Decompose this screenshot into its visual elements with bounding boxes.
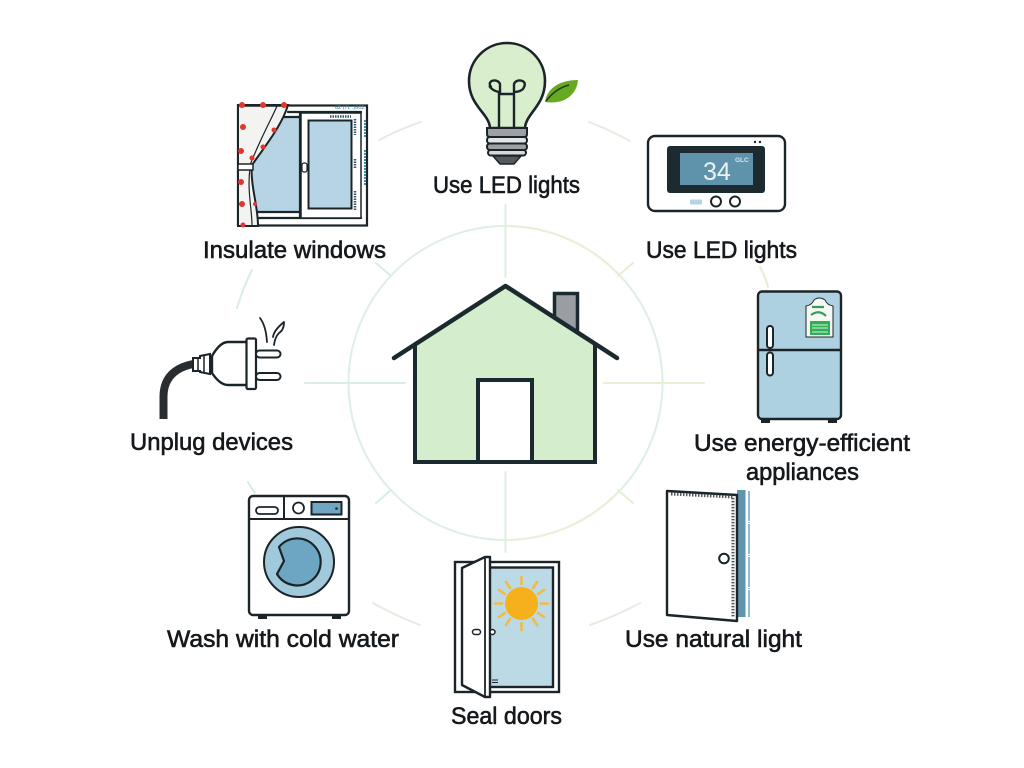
label: Insulate windows	[203, 237, 386, 264]
item: washer	[167, 496, 399, 653]
icon: thermostat: 34	[703, 158, 731, 186]
label: Seal doors	[451, 703, 562, 730]
icon: window with curtain: 62 (7L .)602	[335, 105, 364, 111]
icon: door with seal	[667, 490, 749, 621]
hub ring and spokes	[237, 122, 768, 625]
icon: refrigerator	[758, 292, 841, 423]
curtain red dots	[238, 102, 287, 228]
icon: thermostat	[648, 136, 785, 211]
label: Use LED lights	[433, 172, 580, 199]
item: unplug	[130, 318, 293, 456]
icon: window with curtain	[238, 102, 367, 228]
icon: light bulb	[469, 43, 578, 164]
label: Use energy-efficient	[694, 430, 910, 457]
energy label	[806, 298, 833, 337]
label: Unplug devices	[130, 429, 293, 456]
icon: door with sunlight	[455, 557, 559, 697]
icon: washing machine	[249, 496, 349, 619]
window dimension marks	[330, 116, 365, 211]
item: thermostat	[646, 136, 797, 264]
item: open door with sun	[451, 557, 562, 730]
sun	[505, 587, 538, 620]
item: LED bulb, top	[433, 43, 580, 199]
house body	[415, 285, 595, 462]
label: Use LED lights	[646, 237, 797, 264]
item: fridge	[694, 292, 910, 486]
house door	[478, 380, 532, 462]
label	[694, 430, 910, 486]
roof	[394, 286, 617, 358]
item: closed door	[625, 490, 802, 653]
icon: leaf	[545, 80, 578, 102]
label: appliances	[746, 459, 859, 486]
icon: central house	[394, 285, 617, 462]
icon: thermostat: GLC	[735, 157, 749, 164]
label: Wash with cold water	[167, 626, 399, 653]
curtain	[238, 105, 288, 226]
chimney	[554, 294, 578, 334]
icon: plug	[164, 318, 284, 419]
label: Use natural light	[625, 626, 802, 653]
item: insulate windows	[203, 102, 386, 264]
